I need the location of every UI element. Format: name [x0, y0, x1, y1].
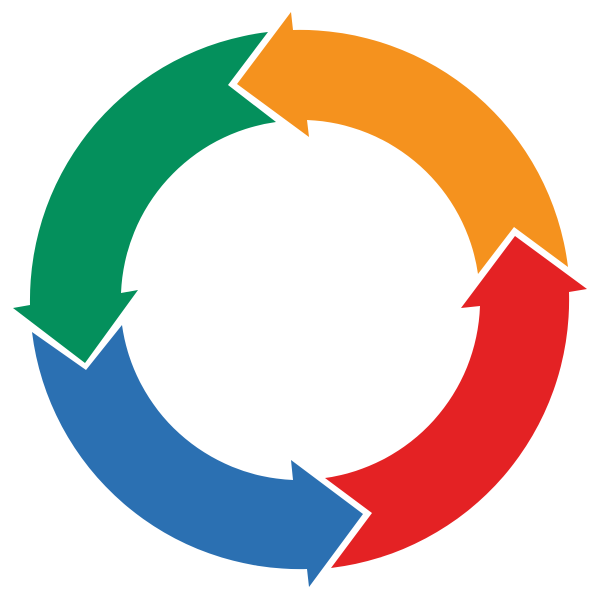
arrow: orange: [237, 12, 568, 274]
arrow: blue: [32, 325, 363, 587]
arrow: green: [13, 32, 276, 363]
arrow: red: [325, 236, 587, 568]
